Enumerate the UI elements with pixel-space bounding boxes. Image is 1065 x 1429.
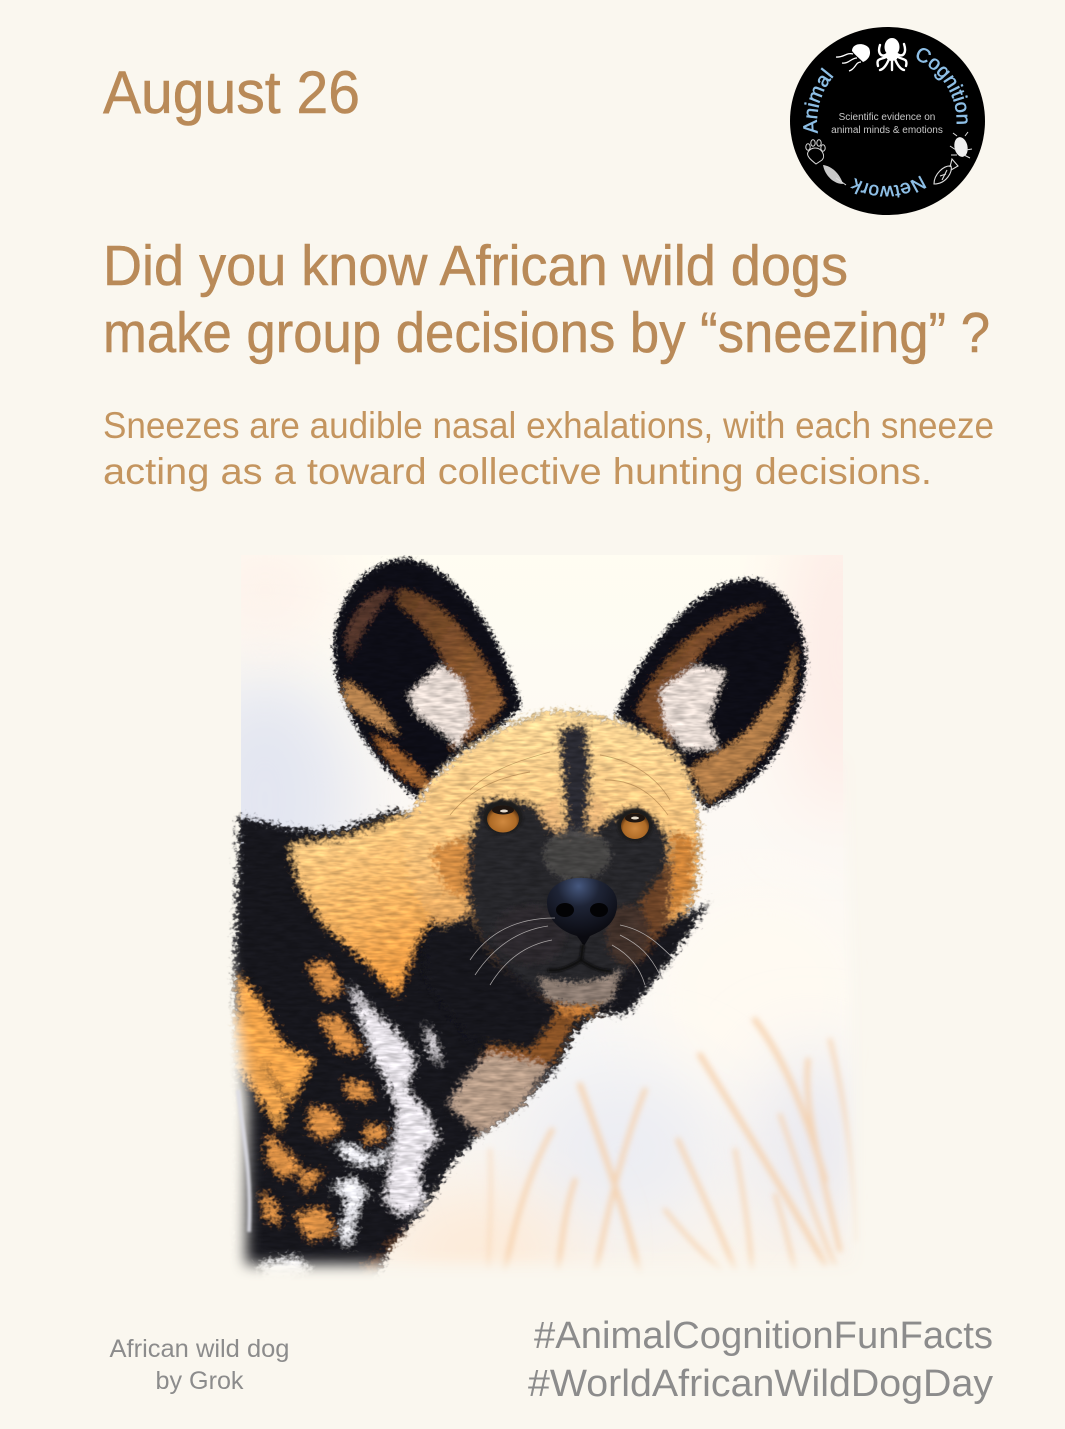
hashtags xyxy=(528,1315,993,1405)
subheading: Sneezes are audible nasal exhalations, with each sneeze xyxy=(103,405,994,446)
image caption: by Grok xyxy=(156,1367,244,1395)
left ear xyxy=(333,558,522,800)
logo: Animal Cognition Network badge xyxy=(790,27,985,215)
right ear inner brown xyxy=(636,606,765,745)
logo: Animal Cognition Network badge: animal minds & emotions xyxy=(831,125,943,136)
mouth xyxy=(548,944,612,971)
headline: make group decisions by “sneezing” ? xyxy=(103,301,990,365)
dog figure xyxy=(228,558,807,1290)
headline xyxy=(103,234,990,365)
whiskers xyxy=(470,918,675,985)
logo: Animal Cognition Network badge: Cognition xyxy=(916,48,968,124)
fur strokes on the forehead xyxy=(450,752,670,815)
nose xyxy=(547,878,617,946)
headline: Did you know African wild dogs xyxy=(103,234,848,298)
face dark lower fur xyxy=(425,860,712,1050)
head xyxy=(405,709,701,1016)
subheading: acting as a toward collective hunting decisions. xyxy=(103,451,932,492)
logo: Animal Cognition Network badge: Network xyxy=(850,176,926,198)
date heading: August 26 xyxy=(103,59,360,126)
cheek shade xyxy=(430,835,468,900)
image caption: African wild dog xyxy=(110,1335,290,1363)
left ear white tuft xyxy=(408,665,472,748)
left ear inner brown xyxy=(398,590,504,750)
illustration: African wild dog portrait xyxy=(227,555,856,1276)
forehead stripe xyxy=(558,724,591,835)
forehead light orange inset xyxy=(538,796,565,835)
hashtags: #WorldAfricanWildDogDay xyxy=(528,1363,993,1405)
shoulder orange patch xyxy=(290,812,450,995)
orange spots xyxy=(262,962,415,1275)
white fur patches xyxy=(260,985,440,1285)
right ear white tuft xyxy=(660,665,725,750)
left eye xyxy=(483,800,523,834)
body xyxy=(228,808,600,1290)
painted backdrop xyxy=(241,568,846,1266)
logo: Animal Cognition Network badge: Animal xyxy=(803,67,834,134)
hashtags: #AnimalCognitionFunFacts xyxy=(534,1315,993,1357)
icon: octopus xyxy=(877,38,906,70)
icon: fish xyxy=(934,159,958,184)
image caption xyxy=(110,1335,290,1395)
subheading xyxy=(103,405,994,492)
throat fur xyxy=(448,1000,590,1135)
icon: feather xyxy=(823,165,846,185)
background grass xyxy=(488,1020,858,1275)
muzzle and dark mask xyxy=(466,798,669,1005)
left flank orange patch xyxy=(238,975,312,1105)
logo: Animal Cognition Network badge: Scientific evidence on xyxy=(839,112,935,123)
muzzle grey highlight xyxy=(494,829,650,1005)
icon: paw xyxy=(806,140,825,164)
right ear xyxy=(615,578,807,810)
far-left white fur line xyxy=(238,1090,250,1232)
icon: jellyfish xyxy=(836,44,870,71)
right eye xyxy=(617,808,653,842)
icon: beetle xyxy=(950,132,972,158)
